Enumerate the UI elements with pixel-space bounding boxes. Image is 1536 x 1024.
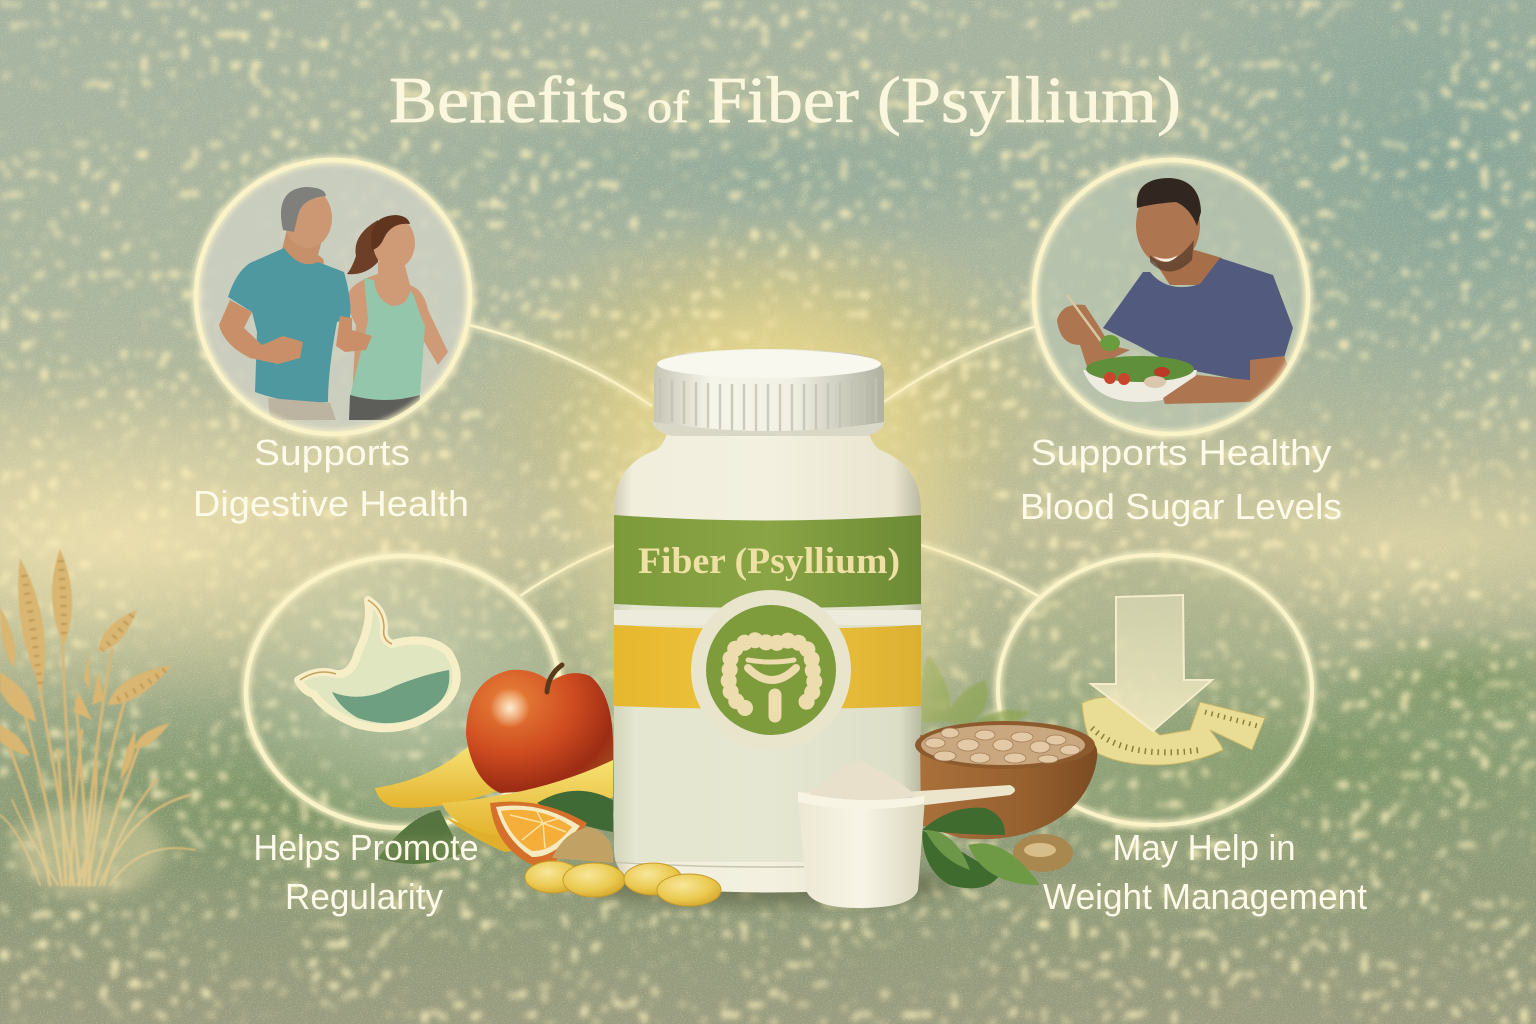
banana behind apple: [375, 745, 500, 808]
woman: [347, 215, 448, 420]
icon: intestine badge: [691, 590, 851, 750]
label: supports healthy blood sugar levels: Supports Healthy: [1030, 432, 1332, 473]
label: supports digestive health: [193, 432, 469, 524]
label: helps promote regularity: Helps Promote: [254, 827, 478, 868]
label: supports digestive health: Digestive Health: [193, 483, 469, 524]
leaf lower left: [378, 810, 462, 864]
tape ticks: [1092, 712, 1258, 752]
bottle cap: [652, 349, 885, 436]
icon: measuring tape back: [1082, 697, 1265, 765]
banana in front of apple: [442, 760, 613, 852]
man eating salad photo circle: [1034, 160, 1308, 434]
icon: downward arrow: [1091, 595, 1212, 731]
label: may help in weight management: [1043, 827, 1367, 917]
label text: Fiber (Psyllium): [638, 541, 900, 582]
label: helps promote regularity: [254, 827, 478, 917]
title: Benefits of Fiber (Psyllium): [389, 64, 1181, 137]
capsules: [525, 861, 721, 906]
wheat grass plant: [0, 549, 195, 895]
stomach circle: [246, 556, 560, 828]
leaves right of scoop: [922, 808, 1040, 888]
apple: [466, 665, 613, 793]
label: may help in weight management: Weight Management: [1043, 876, 1367, 917]
man: [219, 187, 372, 420]
leaf over banana: [537, 791, 613, 832]
powder scoop: [798, 760, 1015, 908]
label: helps promote regularity: Regularity: [285, 876, 443, 917]
label: supports healthy blood sugar levels: Blood Sugar Levels: [1020, 486, 1342, 527]
orange slice: [490, 802, 587, 867]
beans in wooden bowl: [915, 721, 1097, 839]
yellow band: [614, 625, 921, 709]
product bottle: [585, 349, 955, 905]
green label band: [614, 515, 921, 608]
bottle body: [610, 425, 925, 900]
runners photo circle: [196, 160, 470, 434]
label: may help in weight management: May Help in: [1112, 827, 1296, 868]
label: supports healthy blood sugar levels: [1020, 432, 1342, 527]
nut near capsules: [552, 827, 613, 863]
glow behind bottle: [578, 300, 958, 820]
icon: stomach: [298, 600, 457, 728]
connector lines: [469, 325, 1040, 597]
bottle shadow: [585, 865, 955, 905]
nut beside bowl: [1013, 834, 1073, 872]
weight circle: [998, 555, 1312, 825]
foliage behind bottle: [921, 655, 1030, 728]
label: supports digestive health: Supports: [254, 432, 410, 473]
